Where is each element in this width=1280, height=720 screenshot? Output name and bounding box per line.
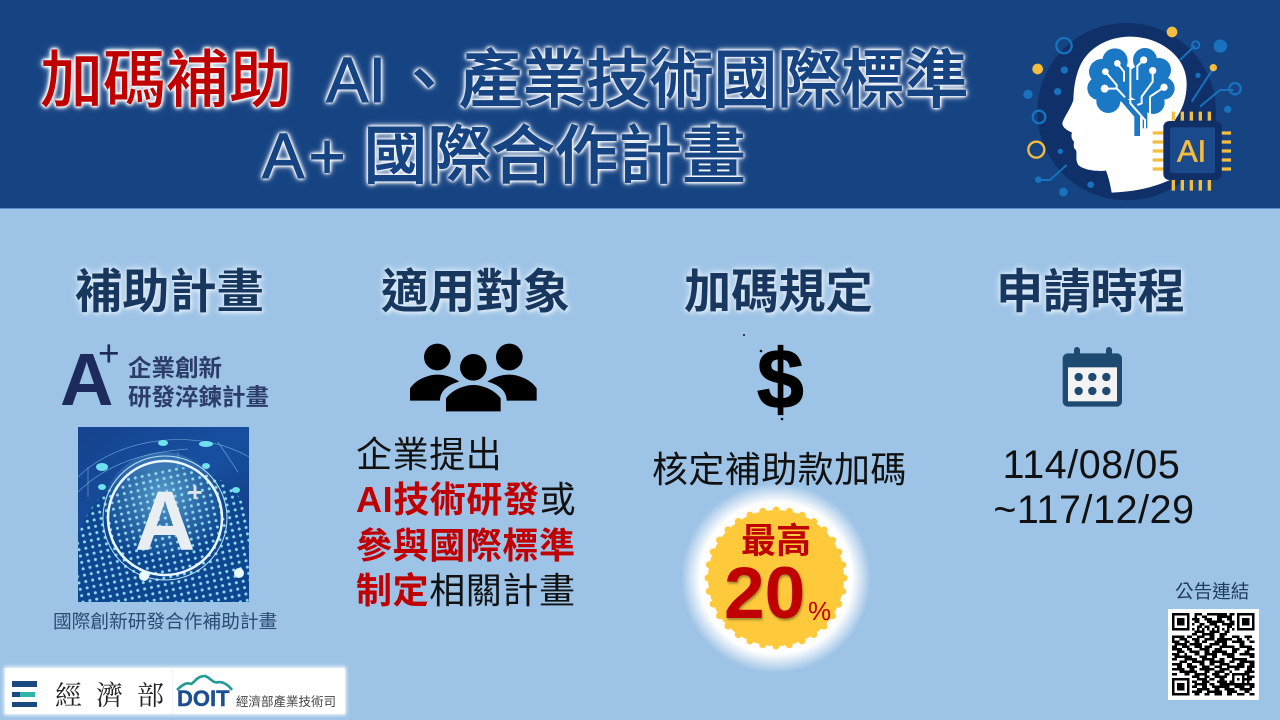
image caption: 國際創新研發合作補助計畫: [53, 611, 277, 632]
logo text: 研發淬鍊計畫: [128, 384, 269, 410]
image: A+ globe illustration: +: [187, 477, 203, 507]
logo: ministry of economic affairs: [5, 668, 172, 714]
DOIT mountain mark: [176, 674, 233, 691]
column heading: 加碼規定: 加碼規定: [684, 266, 873, 319]
badge starburst: [682, 484, 870, 672]
logo: DOIT: [173, 668, 345, 714]
title: first line: AI、產業技術國際標準: [326, 45, 968, 116]
icon: calendar: [1062, 347, 1122, 407]
QR code: [1168, 609, 1259, 700]
column heading: 適用對象: 適用對象: [381, 266, 570, 319]
badge label: 最高: [741, 522, 811, 561]
logo plus sign: +: [98, 333, 120, 374]
title: second line: A+國際合作計畫: [262, 121, 746, 192]
image: A+ globe illustration: [78, 427, 249, 602]
text block: eligible applicants: 參與國際標準: [356, 525, 576, 566]
icon: group of people: [410, 344, 537, 412]
text block: eligible applicants: 制定相關計畫: [356, 570, 576, 611]
badge: up to 20%: [682, 484, 870, 672]
icon: dollar sign: [743, 332, 804, 426]
ministry emblem: [12, 681, 37, 707]
badge percent: %: [808, 596, 831, 626]
ministry name: 經濟部: [55, 681, 178, 711]
QR label: 公告連結: [1175, 581, 1249, 602]
column heading: 補助計畫: 補助計畫: [75, 266, 264, 319]
department name: 經濟部產業技術司: [236, 695, 336, 709]
text block: application period: 114/08/05: [1003, 443, 1180, 487]
image: A+ globe illustration: A: [135, 474, 195, 568]
text block: application period: ~117/12/29: [993, 488, 1195, 532]
logo letter A: A: [60, 338, 113, 421]
icon: AI head with brain and chip: AI: [1177, 134, 1206, 168]
logo: A+ program: [60, 333, 269, 421]
logo text: 企業創新: [128, 355, 222, 381]
dollar glyph: $: [757, 332, 804, 426]
text block: eligible applicants: AI技術研發或: [356, 479, 576, 520]
icon: AI head with brain and chip: [1023, 23, 1242, 200]
text block: application period: [993, 443, 1195, 532]
text block: eligible applicants: [356, 434, 576, 611]
title: red highlight: 加碼補助: [40, 46, 292, 116]
logo strip: ministry and DOIT: [2, 664, 348, 718]
toner specks: [743, 334, 784, 420]
badge number: 20: [724, 553, 805, 634]
column heading: 申請時程: 申請時程: [996, 266, 1185, 319]
text block: eligible applicants: 企業提出: [356, 434, 502, 475]
logo text: [128, 355, 269, 410]
text block: subsidy increase: 核定補助款加碼: [652, 449, 907, 490]
DOIT wordmark: DOIT: [177, 686, 230, 711]
header banner: [0, 0, 1280, 209]
